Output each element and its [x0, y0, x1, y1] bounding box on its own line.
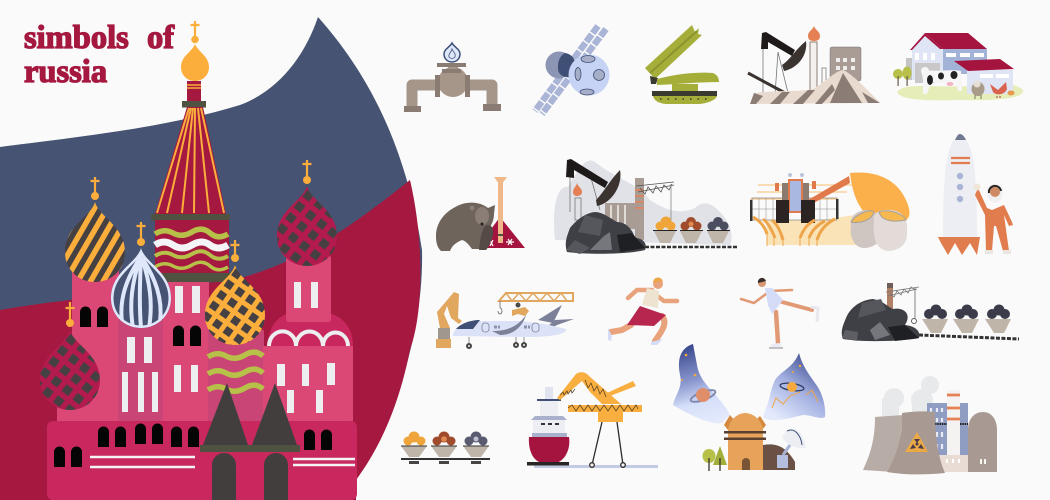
icon: figure skater [741, 278, 818, 348]
icon: farm with animals [893, 33, 1023, 100]
icon: airplane under construction [436, 292, 574, 348]
icon: oil pump and refinery [748, 26, 880, 104]
black arched windows [54, 306, 332, 467]
title: simbols [24, 20, 129, 56]
dome: blue and white [111, 222, 171, 328]
icon: combine harvester and grain [750, 173, 909, 251]
icon: runner [608, 277, 677, 345]
icon: rocket launcher tank [645, 25, 719, 104]
title: russia [24, 54, 107, 90]
icon: bear with balalaika [436, 177, 525, 251]
icon: observatory with projected planets [673, 344, 825, 471]
icon: icebreaker ship and port crane [527, 372, 658, 467]
icon: mine carts [401, 432, 490, 464]
building walls [47, 255, 357, 500]
entrance tents and doors [200, 383, 300, 500]
dome: orange net [205, 240, 265, 345]
title: of [147, 20, 175, 56]
icon: rocket and cosmonaut [938, 134, 1013, 255]
white base lines [90, 457, 355, 467]
central spire [151, 21, 231, 282]
green wave ornaments [208, 352, 263, 391]
dome: striped [65, 177, 125, 282]
icon: nuclear power plant [863, 376, 997, 474]
dome: lower left net [40, 302, 100, 410]
dome: top right net [277, 160, 337, 266]
icon: satellite [535, 26, 610, 114]
cathedral [40, 21, 357, 500]
icon: oil, coal and mining scene [554, 159, 737, 254]
white windows [122, 282, 335, 413]
white arches [269, 331, 348, 346]
icon: coal pile with crane and carts [842, 283, 1019, 341]
flag backdrop [0, 17, 422, 500]
icon: gas pipeline valve [404, 43, 501, 112]
